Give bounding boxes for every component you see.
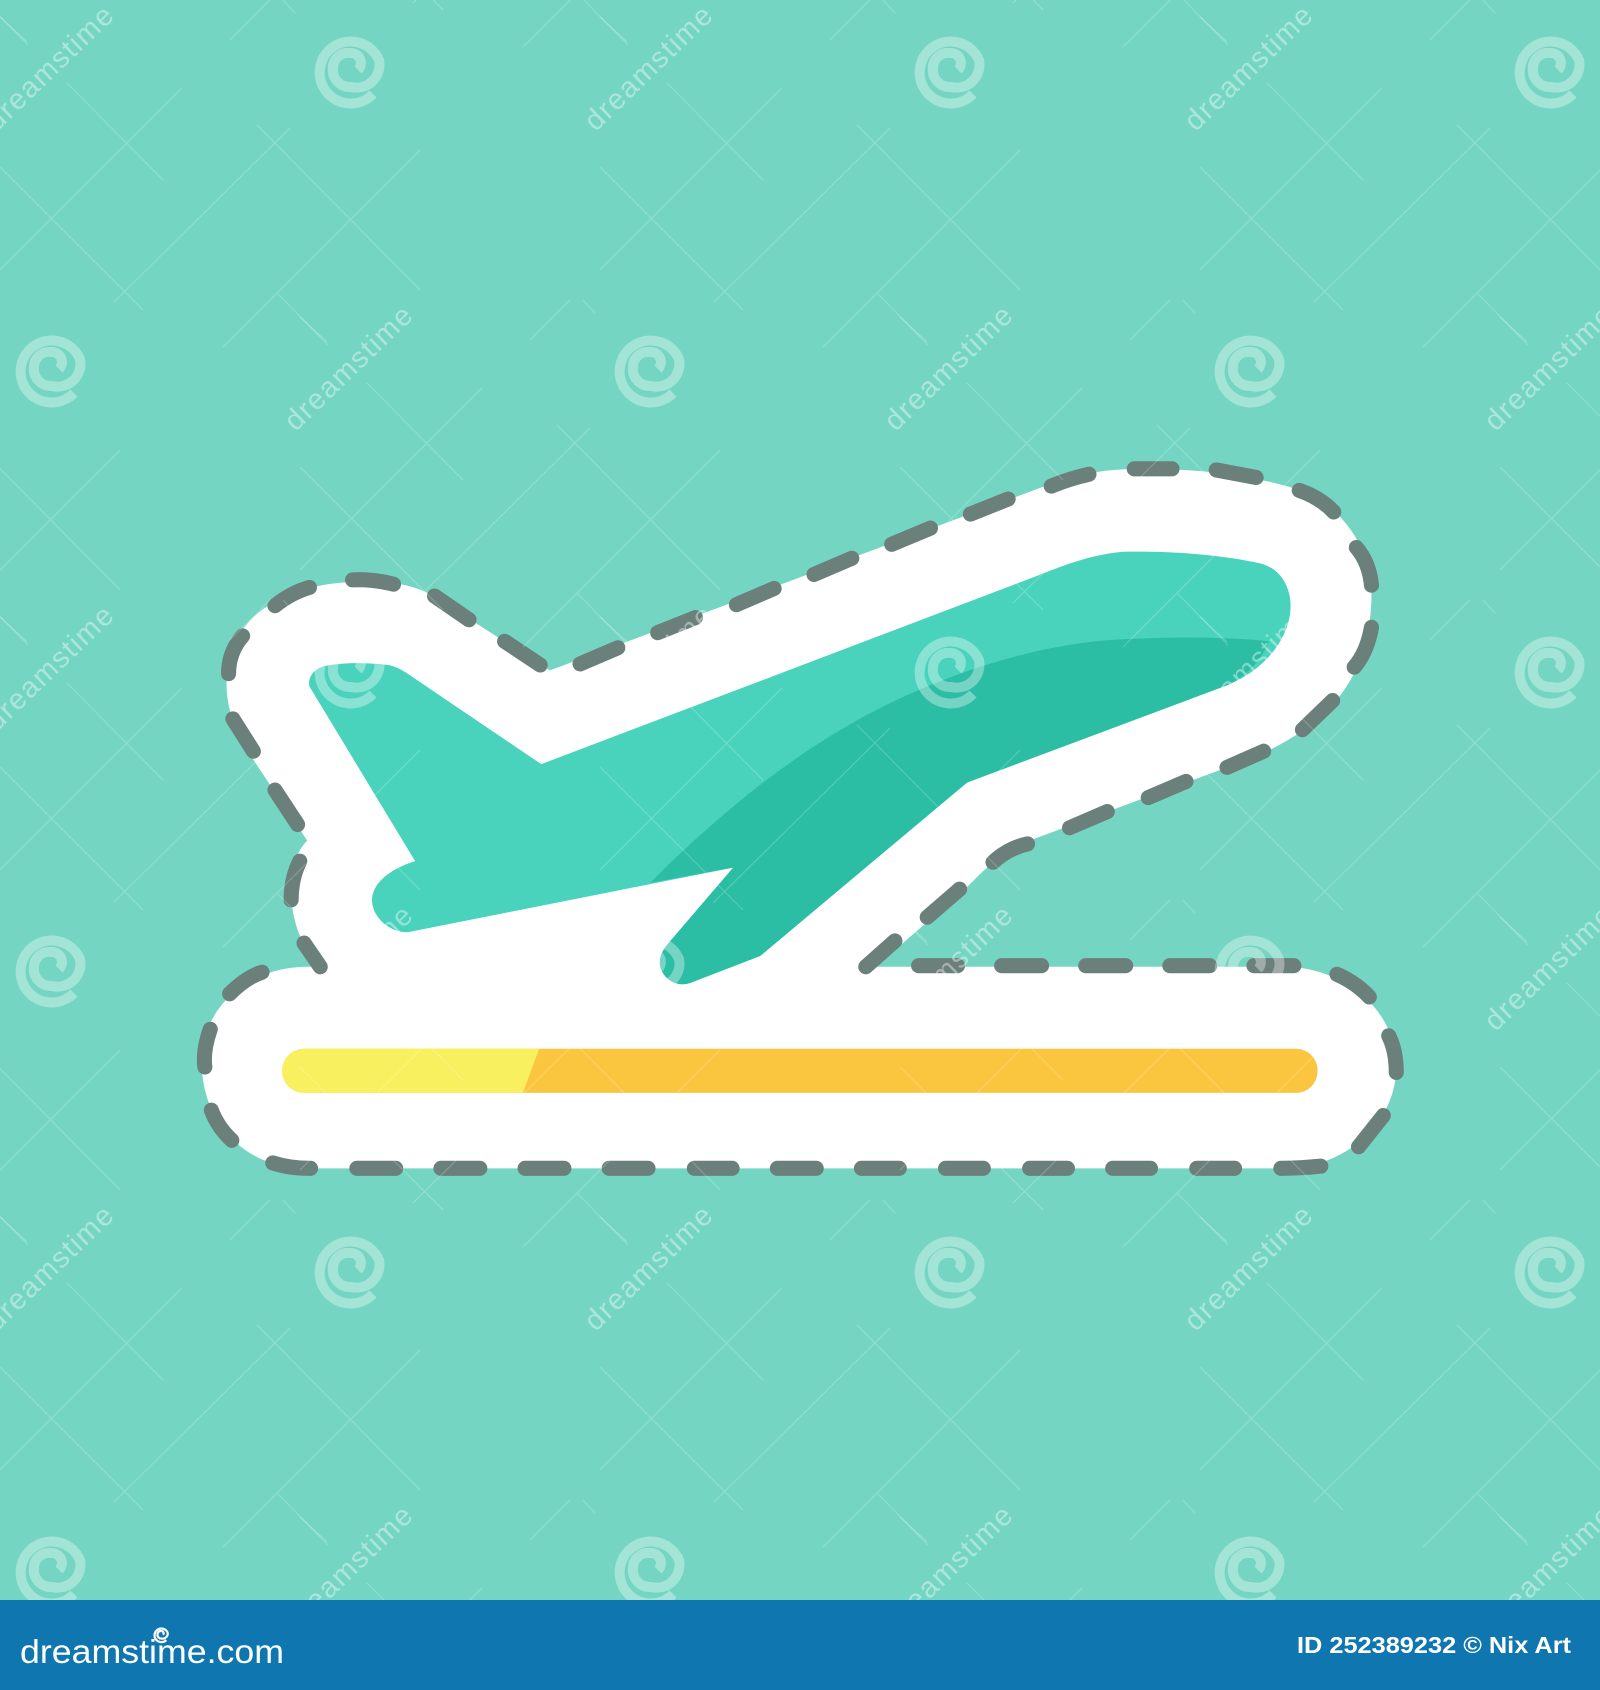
sticker white backing [202,469,1396,1168]
dreamstime watermarks: dreamstime [878,900,1019,1037]
dreamstime watermarks: dreamstime [578,600,719,737]
dreamstime watermarks: dreamstime [278,1500,419,1637]
airplane wing shadow [650,638,1269,984]
dreamstime watermarks: dreamstime [278,900,419,1037]
dreamstime watermarks: dreamstime [1178,1200,1319,1337]
dreamstime watermarks: dreamstime [278,300,419,437]
runway bar [282,1049,1318,1093]
footer logo: dreamstime.com [20,1633,284,1670]
airplane body [309,552,1291,984]
dreamstime watermarks: dreamstime [1178,0,1319,137]
dreamstime watermarks: dreamstime [878,300,1019,437]
sticker: airplane taking off [202,469,1396,1168]
dreamstime watermarks: dreamstime [578,0,719,137]
dreamstime watermarks: dreamstime [578,1200,719,1337]
dashed cut line [204,469,1396,1168]
dreamstime watermarks: dreamstime [1178,600,1319,737]
dreamstime watermarks: dreamstime [878,1500,1019,1637]
footer bar [0,1600,1600,1690]
image ID and credit: ID 252389232 © Nix Art [1297,1632,1571,1658]
